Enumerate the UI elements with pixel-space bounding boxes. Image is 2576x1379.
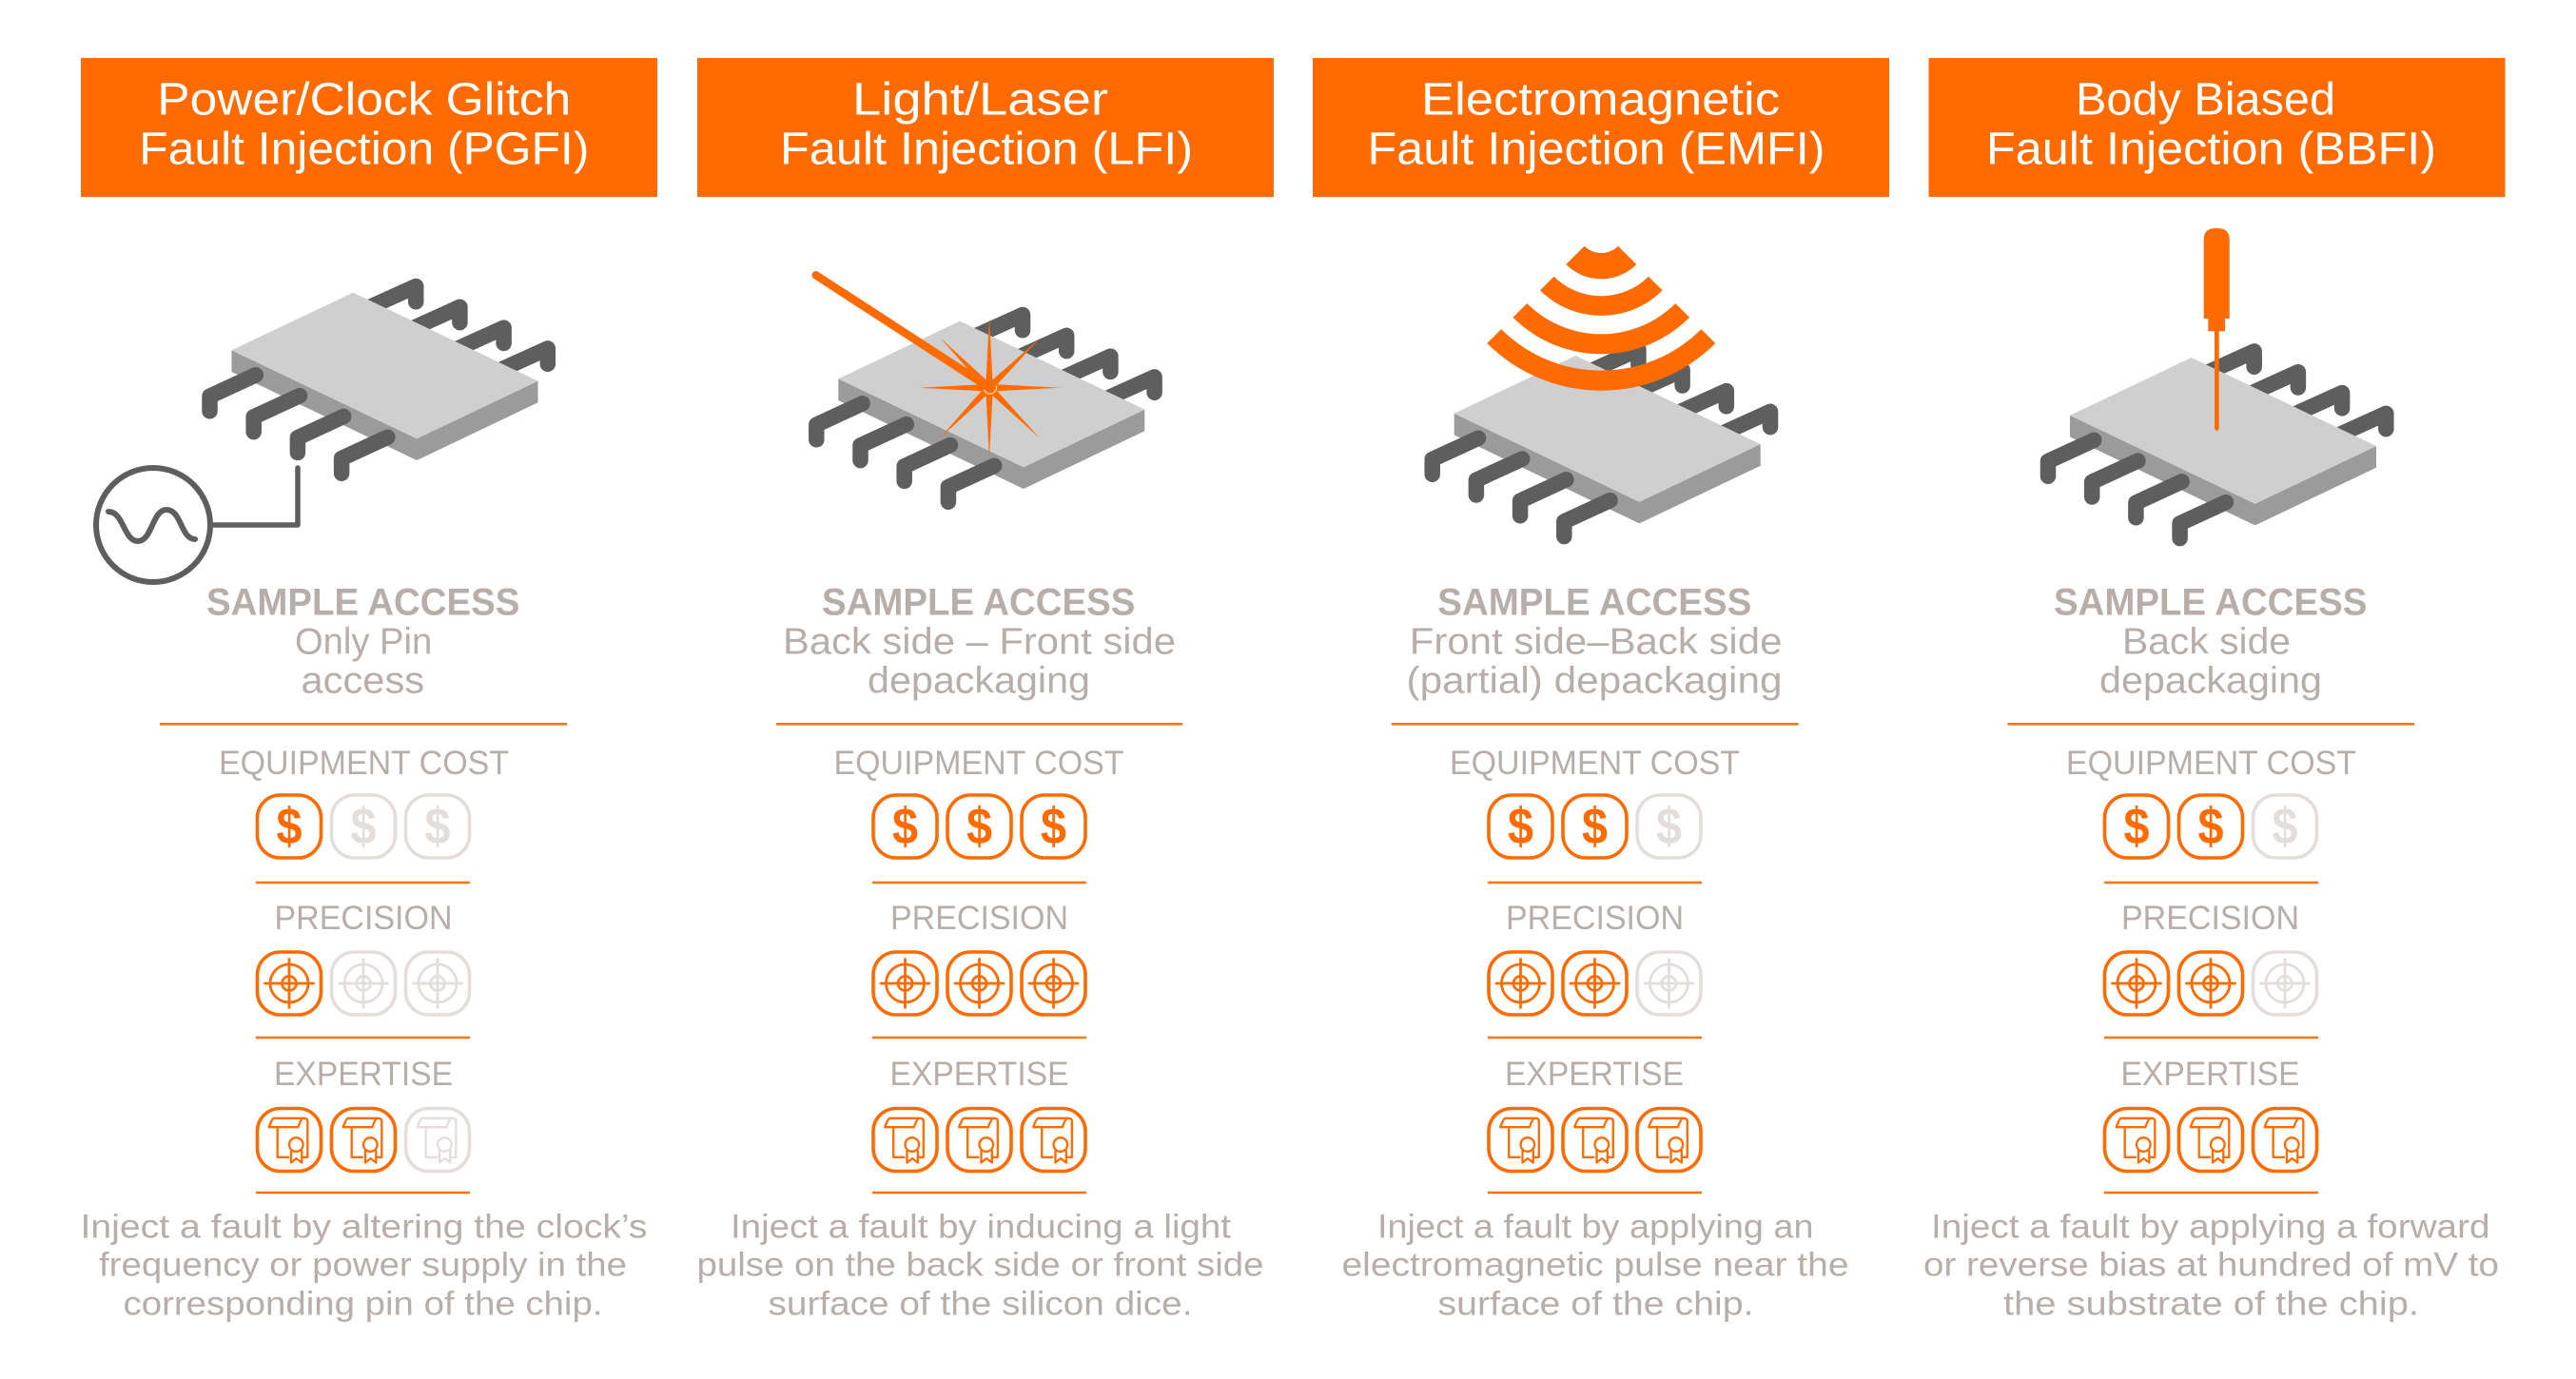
icon: dollar on: $ (1582, 798, 1608, 855)
icon: dollar off: $ (424, 798, 451, 855)
rating: precision (257, 900, 470, 1015)
icon: laser beam and burst (816, 275, 1061, 458)
rating: precision: PRECISION (2121, 900, 2299, 937)
icon: electromagnetic waves (1487, 246, 1715, 391)
rating: expertise (873, 1056, 1085, 1172)
icon: certificate on (257, 1109, 322, 1172)
text: sample access: SAMPLE ACCESS (822, 582, 1135, 624)
rating: precision: PRECISION (274, 900, 453, 937)
chip illustration with signal generator (96, 286, 548, 582)
text: description: surface of the silicon dice. (769, 1286, 1193, 1323)
text: description (80, 1209, 647, 1323)
chip illustration with probe (2048, 228, 2386, 538)
icon: dollar on: $ (276, 798, 302, 855)
rating: equipment cost (833, 745, 1124, 858)
icon: dollar off: $ (2272, 798, 2298, 855)
icon: target on (873, 952, 937, 1015)
heading: Power/Clock Glitch: Fault Injection (PGFI) (139, 125, 589, 175)
icon: target on (2104, 952, 2169, 1015)
icon: target off (2253, 952, 2317, 1015)
icon: dollar off (1637, 795, 1701, 858)
text: description: pulse on the back side or front side (696, 1247, 1263, 1284)
icon: dollar on (2104, 795, 2169, 858)
rating: equipment cost: EQUIPMENT COST (1450, 745, 1740, 782)
text: sample access (2054, 582, 2367, 701)
icon: dollar off: $ (350, 798, 377, 855)
text: description (696, 1209, 1263, 1323)
text: sample access: depackaging (2099, 660, 2322, 701)
icon: dollar off (2253, 795, 2317, 858)
icon: target off (1637, 952, 1701, 1015)
icon: certificate on (947, 1109, 1011, 1172)
heading: Electromagnetic: Fault Injection (EMFI) (1368, 125, 1825, 175)
icon: certificate on (1563, 1109, 1627, 1172)
rating: precision (1489, 900, 1701, 1015)
icon: dollar off: $ (1656, 798, 1682, 855)
panel: LFI column (696, 58, 1274, 1323)
text: description: the substrate of the chip. (2003, 1286, 2419, 1323)
icon: signal generator (96, 468, 298, 582)
rating: equipment cost (219, 745, 509, 858)
text: description (1923, 1209, 2499, 1323)
text: sample access: Back side – Front side (783, 622, 1176, 663)
rating: expertise (1489, 1056, 1701, 1172)
text: sample access: SAMPLE ACCESS (206, 582, 519, 624)
text: sample access (783, 582, 1176, 701)
icon: dollar on (257, 795, 322, 858)
icon: certificate on (1637, 1109, 1701, 1172)
rating: precision (2104, 900, 2317, 1015)
text: sample access: SAMPLE ACCESS (2054, 582, 2367, 624)
icon: certificate on (2104, 1109, 2169, 1172)
icon: target on (1563, 952, 1627, 1015)
icon: dollar off (331, 795, 396, 858)
text: sample access: (partial) depackaging (1406, 660, 1783, 701)
icon: certificate on (2253, 1109, 2317, 1172)
icon: certificate on (331, 1109, 396, 1172)
heading: Electromagnetic (1313, 58, 1889, 197)
icon: certificate on (1489, 1109, 1552, 1172)
rating: equipment cost: EQUIPMENT COST (219, 745, 509, 782)
heading: Power/Clock Glitch: Power/Clock Glitch (157, 75, 571, 126)
text: sample access: depackaging (868, 660, 1090, 701)
rating: precision: PRECISION (890, 900, 1068, 937)
icon: dollar on: $ (966, 798, 992, 855)
rating: expertise: EXPERTISE (890, 1056, 1069, 1093)
rating: expertise: EXPERTISE (274, 1056, 453, 1093)
text: sample access: Front side–Back side (1410, 622, 1782, 663)
text: description: or reverse bias at hundred of mV to (1923, 1247, 2499, 1284)
icon: dollar off (405, 795, 470, 858)
icon: target on (2178, 952, 2243, 1015)
text: sample access: Only Pin (295, 622, 432, 663)
heading: Light/Laser (697, 58, 1274, 197)
text: sample access: access (301, 660, 424, 701)
icon: dollar on (1489, 795, 1552, 858)
heading: Electromagnetic: Electromagnetic (1421, 75, 1780, 126)
text: description: electromagnetic pulse near the (1341, 1247, 1849, 1284)
panel: PGFI column (80, 58, 657, 1323)
icon: target on (257, 952, 322, 1015)
icon: target off (405, 952, 470, 1015)
icon: dollar on (947, 795, 1011, 858)
icon: certificate on (873, 1109, 937, 1172)
rating: equipment cost (2066, 745, 2356, 858)
text: sample access (206, 582, 519, 701)
icon: target off (331, 952, 396, 1015)
rating: precision: PRECISION (1506, 900, 1684, 937)
rating: expertise (257, 1056, 470, 1172)
rating: precision (873, 900, 1085, 1015)
rating: expertise: EXPERTISE (1505, 1056, 1684, 1093)
icon: certificate on (2178, 1109, 2243, 1172)
heading: Power/Clock Glitch (81, 58, 657, 197)
icon: dollar on: $ (2123, 798, 2150, 855)
text: description: corresponding pin of the chip. (124, 1286, 603, 1323)
icon: dollar on (2178, 795, 2243, 858)
chip illustration with laser (816, 275, 1155, 502)
text: sample access: SAMPLE ACCESS (1437, 582, 1751, 624)
heading: Light/Laser: Fault Injection (LFI) (780, 125, 1193, 175)
rating: equipment cost: EQUIPMENT COST (2066, 745, 2356, 782)
icon: certificate on (1022, 1109, 1085, 1172)
rating: equipment cost (1450, 745, 1740, 858)
icon: dollar on: $ (892, 798, 918, 855)
rating: expertise (2104, 1056, 2317, 1172)
rating: equipment cost: EQUIPMENT COST (833, 745, 1124, 782)
panel: EMFI column (1313, 58, 1889, 1323)
icon: dollar on: $ (2197, 798, 2224, 855)
text: sample access: Back side (2122, 622, 2291, 663)
rating: expertise: EXPERTISE (2121, 1056, 2300, 1093)
heading: Light/Laser: Light/Laser (852, 75, 1108, 126)
icon: dollar on: $ (1041, 798, 1066, 855)
text: description: Inject a fault by inducing a light (731, 1209, 1231, 1246)
icon: probe needle (2204, 228, 2230, 432)
icon: dollar on (873, 795, 937, 858)
text: description: Inject a fault by altering the clock’s (80, 1209, 647, 1246)
icon: target on (947, 952, 1011, 1015)
icon: dollar on (1563, 795, 1627, 858)
icon: certificate off (405, 1109, 470, 1172)
text: sample access (1406, 582, 1783, 701)
chip illustration with electromagnetic pulse (1433, 246, 1770, 536)
text: description: Inject a fault by applying a forward (1931, 1209, 2490, 1246)
icon: target on (1022, 952, 1085, 1015)
icon: dollar on: $ (1508, 798, 1533, 855)
text: description: Inject a fault by applying an (1377, 1209, 1813, 1246)
heading: Body Biased: Fault Injection (BBFI) (1986, 125, 2436, 175)
icon: target on (1489, 952, 1552, 1015)
panel: BBFI column (1923, 58, 2506, 1323)
text: description: frequency or power supply in the (99, 1247, 627, 1284)
text: description (1341, 1209, 1849, 1323)
heading: Body Biased: Body Biased (2076, 75, 2335, 126)
heading: Body Biased (1929, 58, 2506, 197)
icon: dollar on (1022, 795, 1085, 858)
text: description: surface of the chip. (1438, 1286, 1754, 1323)
